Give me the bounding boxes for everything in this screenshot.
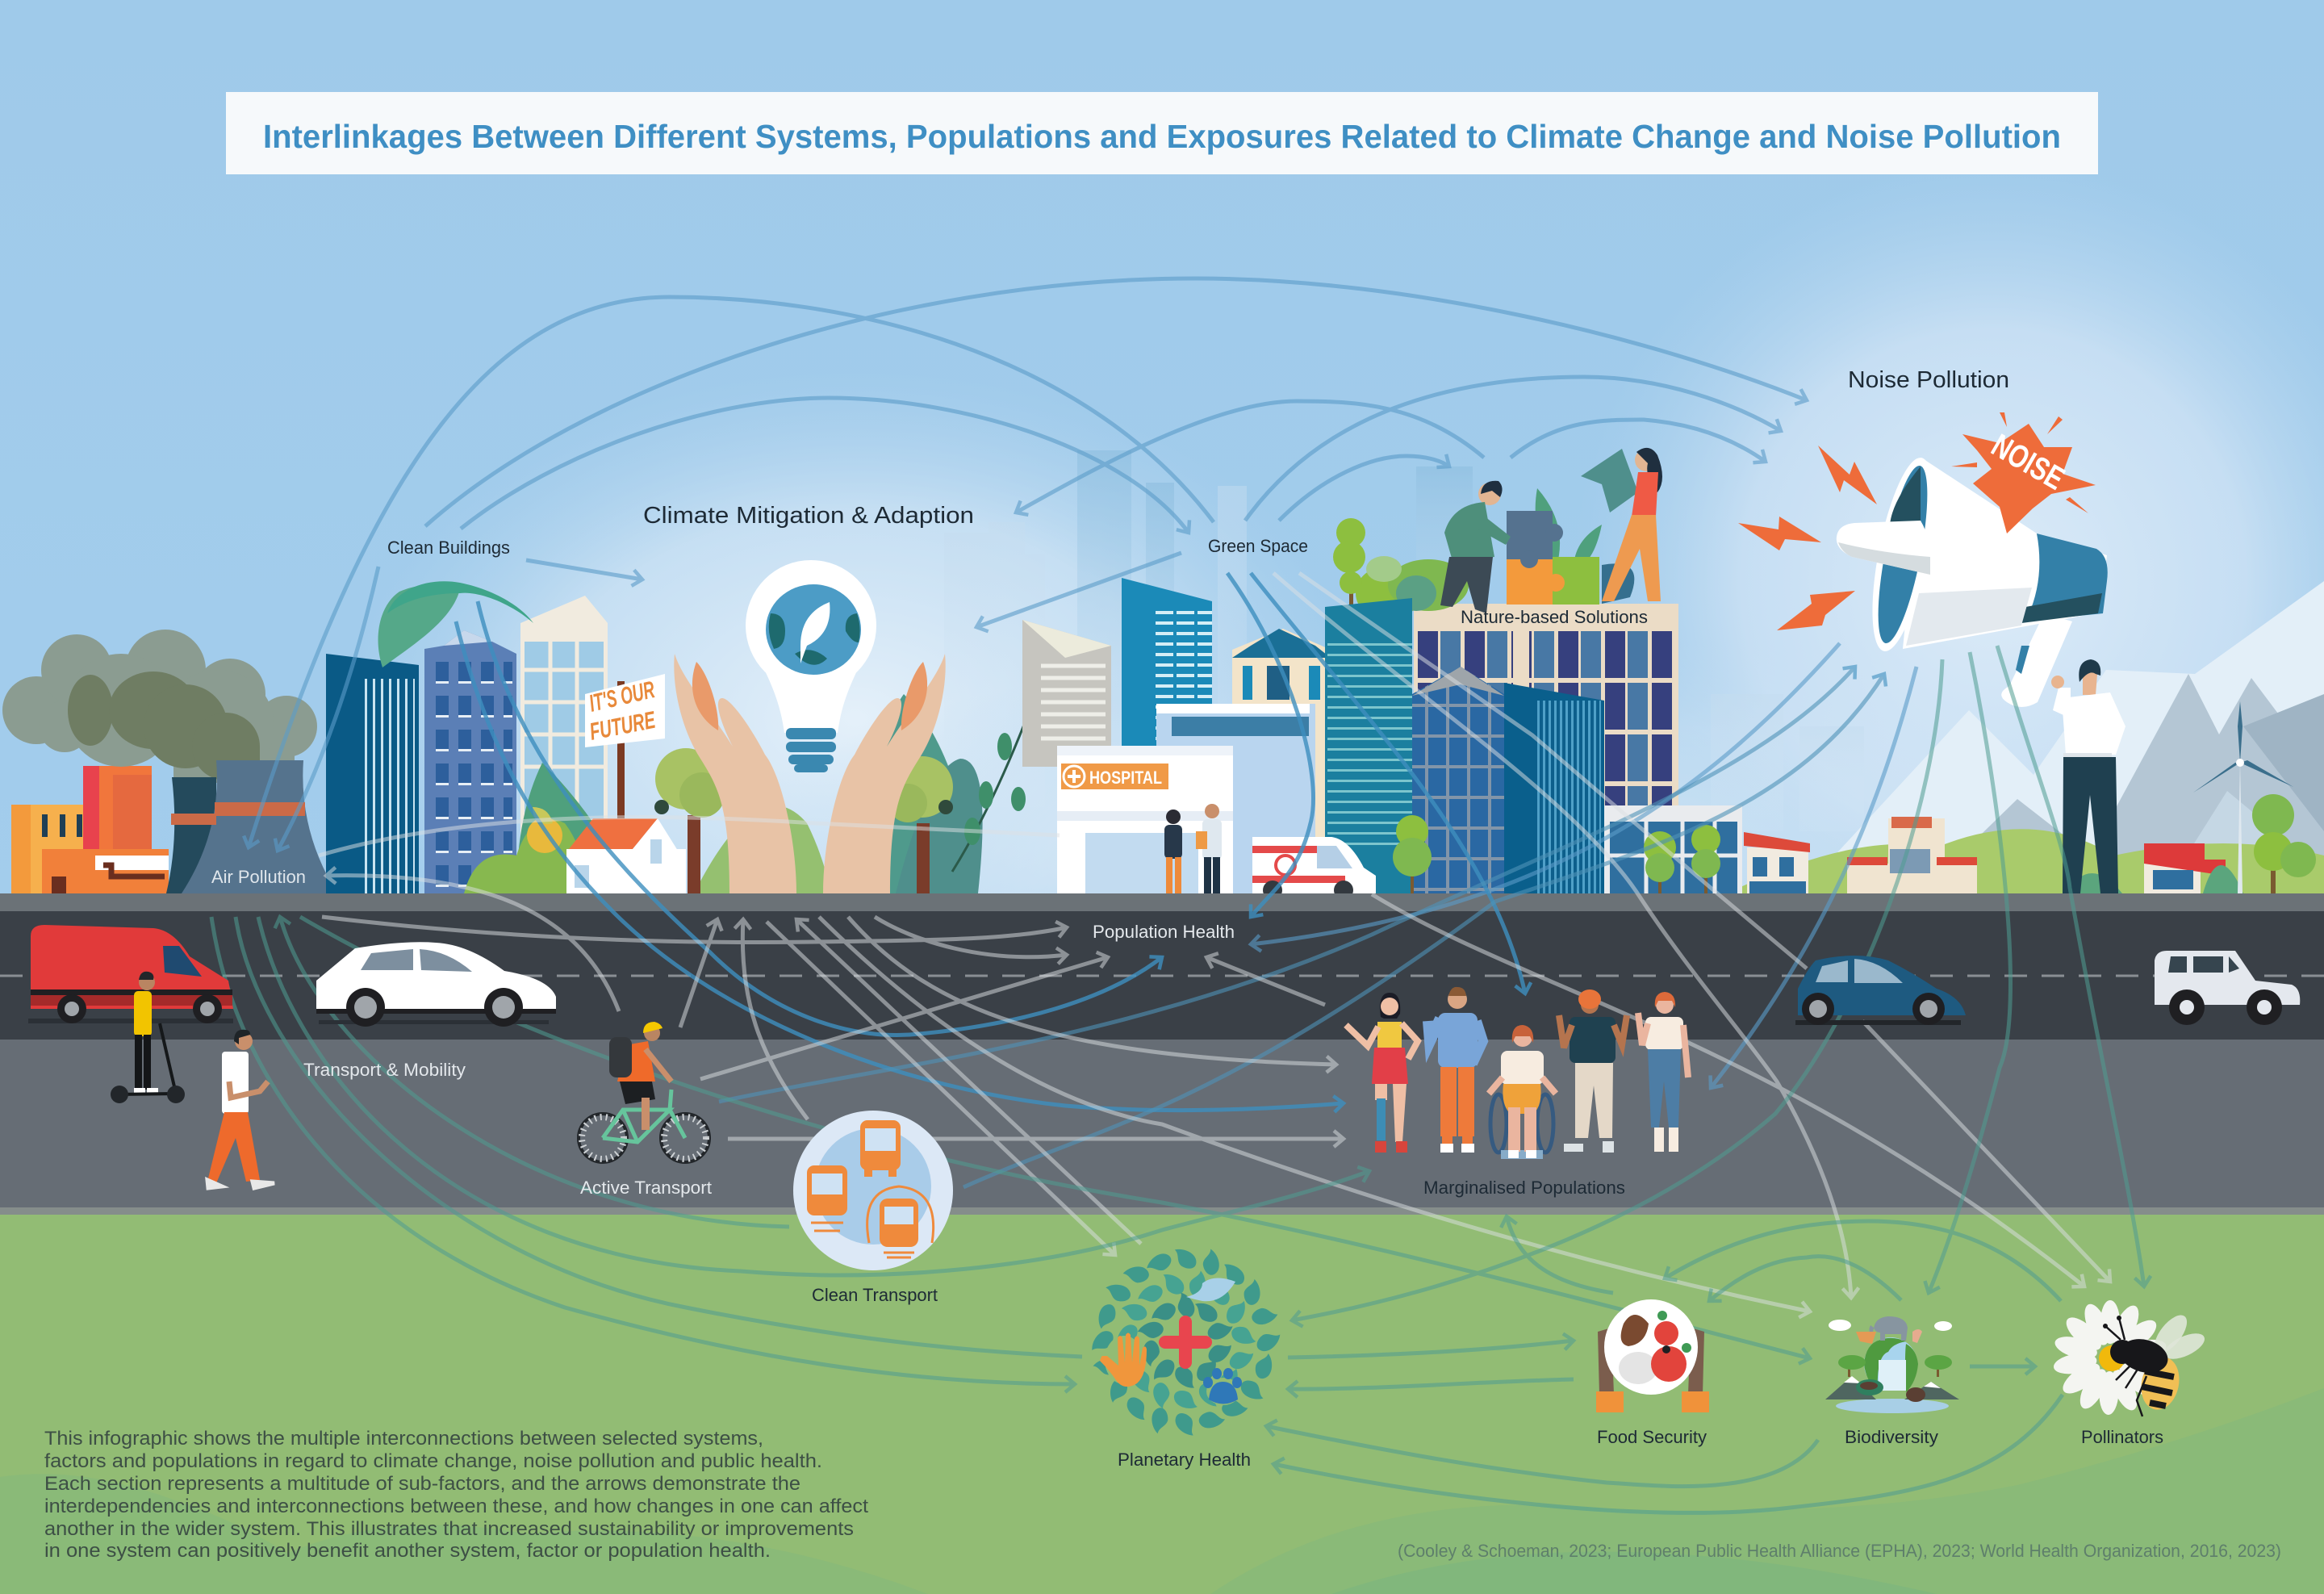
icon: clean transport circle [793, 1111, 953, 1270]
mountains [1799, 581, 2324, 893]
blue car [1795, 956, 1966, 1025]
doctor and visitor [1164, 804, 1222, 893]
hospital: HOSPITAL [1089, 768, 1162, 788]
label: food security: Food Security [1597, 1427, 1707, 1447]
man holding megaphone [2051, 659, 2125, 893]
white car [316, 942, 556, 1027]
cyclist [579, 1022, 709, 1162]
teal office tower [1325, 598, 1412, 893]
description paragraph: another in the wider system. This illustrates that increased sustainability or improvements [44, 1518, 854, 1540]
arrows: deep blue links [456, 573, 1525, 1111]
arrows: teal links [211, 646, 2144, 1512]
cream building [1232, 629, 1331, 893]
label: green space: Green Space [1208, 536, 1308, 556]
label: pollinators: Pollinators [2081, 1427, 2163, 1447]
rooftop greenery [1333, 488, 1634, 621]
arrows: sky interlinks [249, 278, 1916, 1088]
foreground plants left [464, 763, 637, 893]
low building behind hospital [1156, 704, 1315, 893]
front office towers [1412, 667, 1604, 893]
ambulance [1252, 837, 1376, 900]
green hills right [1727, 829, 2324, 893]
nature-based solutions label: Nature-based Solutions [1461, 607, 1648, 627]
vine [952, 710, 1030, 872]
man with orange turban [1559, 989, 1627, 1153]
icon: hands holding light bulb [674, 560, 946, 893]
white suv [2155, 951, 2300, 1025]
description paragraph: interdependencies and interconnections between these, and how changes in one can affect [44, 1496, 868, 1517]
description paragraph [44, 1428, 868, 1562]
smoke cloud [2, 630, 317, 787]
arrows: grey road links [319, 573, 2110, 1312]
icon: bee on flower [2052, 1300, 2209, 1416]
street trees [1393, 815, 1720, 893]
person in wheelchair [1489, 1025, 1556, 1159]
scooter rider [111, 972, 185, 1103]
puzzle pieces [1507, 449, 1638, 605]
label: planetary health: Planetary Health [1118, 1450, 1251, 1470]
man with puzzle piece [1440, 481, 1511, 613]
icon: planetary health [1091, 1248, 1281, 1437]
heading: noise pollution: Noise Pollution [1848, 367, 2009, 393]
trees beside hands [654, 748, 953, 893]
pedestrian with phone [207, 1030, 274, 1188]
label: population health: Population Health [1093, 922, 1235, 942]
label: active transport: Active Transport [580, 1178, 712, 1198]
grey office tower [1022, 620, 1111, 767]
air pollution label: Air Pollution [211, 867, 306, 887]
heading: climate mitigation: Climate Mitigation & Adaption [643, 503, 974, 529]
hospital [1057, 746, 1233, 893]
label: transport and mobility: Transport & Mobility [303, 1060, 466, 1080]
label: clean transport: Clean Transport [812, 1285, 938, 1305]
noise burst: NOISE [1985, 428, 2071, 497]
title box [226, 92, 2098, 174]
marginalised people [1346, 987, 1688, 1159]
buildings left group [326, 581, 608, 893]
icon: biodiversity [1825, 1316, 1959, 1413]
sign: It's our future: IT'S OUR [587, 676, 658, 718]
title box: Interlinkages Between Different Systems, Populations and Exposures Related to Climate Change and Noise Pollution [263, 118, 2061, 155]
label: clean buildings: Clean Buildings [387, 538, 510, 558]
person with prosthetic leg [1346, 993, 1418, 1153]
factory [11, 766, 169, 893]
description paragraph: factors and populations in regard to climate change, noise pollution and public health. [44, 1450, 822, 1472]
sign: It's our future: FUTURE [587, 707, 658, 746]
low right building [1604, 805, 1742, 893]
description paragraph: This infographic shows the multiple interconnections between selected systems, [44, 1428, 763, 1450]
trees far right [1990, 794, 2316, 893]
teal tower [1122, 578, 1212, 751]
description paragraph: Each section represents a multitude of sub-factors, and the arrows demonstrate the [44, 1473, 800, 1495]
label: biodiversity: Biodiversity [1845, 1427, 1938, 1447]
house [566, 818, 686, 893]
description paragraph: in one system can positively benefit another system, factor or population health. [44, 1540, 771, 1562]
icon: food security [1596, 1299, 1709, 1412]
nature-based office building [1414, 604, 1678, 896]
sign: It's our future [585, 674, 665, 893]
road [0, 893, 2324, 1215]
man in blue sweater [1428, 987, 1483, 1153]
cooling towers [166, 760, 337, 893]
lightning bolts [1738, 446, 1877, 630]
label: marginalised populations: Marginalised Populations [1423, 1178, 1625, 1198]
houses right [1744, 817, 2243, 893]
hills behind hands [694, 694, 983, 893]
red van [28, 925, 233, 1023]
arrows: blue links to megaphone [719, 667, 1884, 1187]
green ground [0, 1215, 2324, 1594]
faded distant city skyline [944, 450, 1864, 831]
megaphone [1837, 454, 2108, 707]
woman with puzzle piece [1602, 448, 1662, 601]
noise burst [1951, 412, 2096, 533]
wind turbine [2193, 701, 2293, 893]
woman in jeans [1638, 992, 1688, 1152]
citation: (Cooley & Schoeman, 2023; European Public Health Alliance (EPHA), 2023; World Health Organization, 2016, 2023) [1398, 1541, 2281, 1561]
